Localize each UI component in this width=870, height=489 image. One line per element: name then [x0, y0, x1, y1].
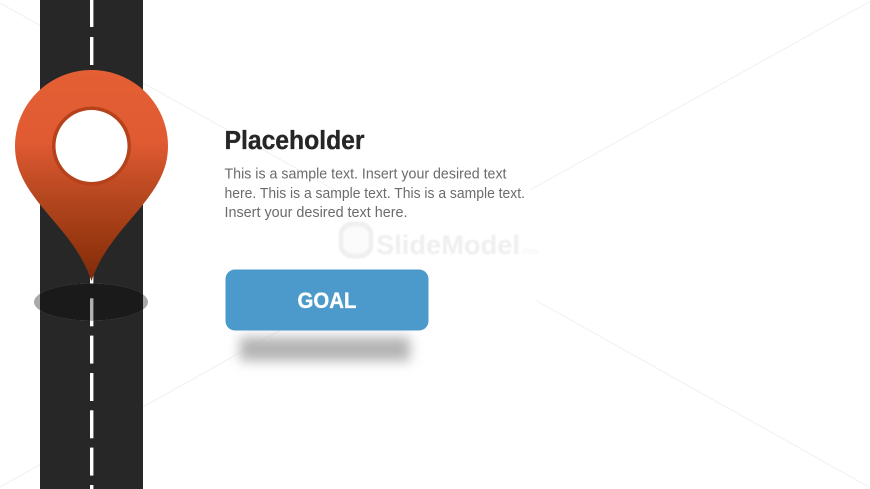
body text	[224, 166, 525, 221]
body text: This is a sample text. Insert your desired text	[224, 166, 506, 182]
icon: location pin	[15, 70, 168, 281]
body text: Insert your desired text here.	[224, 205, 408, 221]
watermark	[341, 224, 538, 260]
goal button shadow	[240, 337, 410, 361]
goal button: GOAL	[298, 288, 356, 313]
pin shadow ellipse	[34, 284, 148, 320]
watermark: SlideModel	[376, 230, 520, 260]
road center dashes	[90, 0, 93, 489]
goal button	[226, 270, 428, 330]
heading: Placeholder	[224, 127, 365, 155]
road	[40, 0, 143, 489]
body text: here. This is a sample text. This is a sample text.	[224, 186, 525, 202]
watermark: .com	[520, 246, 538, 256]
